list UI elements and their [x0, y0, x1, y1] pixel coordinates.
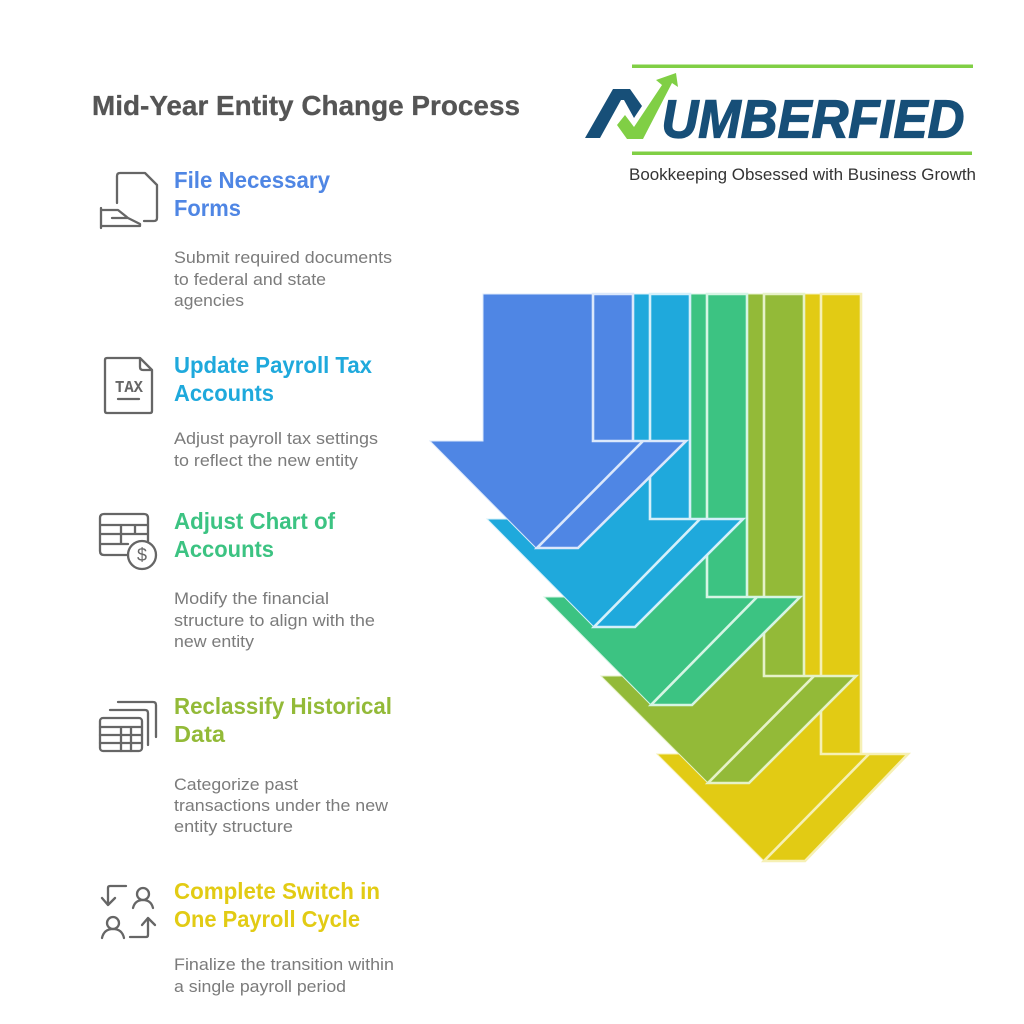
heading: file necessary forms: Forms — [174, 195, 241, 221]
heading: complete switch in one payroll cycle — [174, 878, 380, 932]
description: adjust chart of accounts: new entity — [174, 633, 255, 651]
description: complete switch in one payroll cycle: a single payroll period — [174, 978, 346, 996]
step 4: reclassify historical data — [100, 693, 392, 836]
arrow 5: yellow — [657, 294, 908, 861]
icon: table with dollar: $ — [137, 545, 147, 565]
heading: reclassify historical data: Reclassify Historical — [174, 693, 392, 719]
logo: Numberfied: Bookkeeping Obsessed with Business Growth — [629, 165, 976, 184]
step 5: complete switch in one payroll cycle — [102, 878, 394, 996]
step 1: file necessary forms — [101, 167, 392, 310]
description: update payroll tax accounts: Adjust payroll tax settings — [174, 430, 378, 448]
description: reclassify historical data: Categorize past — [174, 776, 298, 794]
heading: reclassify historical data: Data — [174, 721, 225, 747]
heading: adjust chart of accounts — [174, 508, 335, 562]
description: adjust chart of accounts: Modify the financial — [174, 590, 329, 608]
title: Mid-Year Entity Change Process — [92, 90, 520, 121]
step 3: adjust chart of accounts — [100, 508, 375, 651]
icon: people swapping — [102, 886, 155, 938]
description: update payroll tax accounts — [174, 430, 378, 470]
description: reclassify historical data — [174, 776, 388, 836]
icon: document in hand — [101, 173, 157, 228]
icon: table with dollar — [100, 514, 156, 569]
icon: tax document: TAX — [115, 379, 144, 398]
heading: update payroll tax accounts: Update Payroll Tax — [174, 352, 372, 378]
description: update payroll tax accounts: to reflect the new entity — [174, 452, 359, 470]
heading: adjust chart of accounts: Adjust Chart of — [174, 508, 335, 534]
icon: stacked tables — [100, 702, 156, 751]
description: reclassify historical data: transactions under the new — [174, 797, 388, 815]
description: file necessary forms: to federal and state — [174, 271, 326, 289]
heading: update payroll tax accounts: Accounts — [174, 380, 274, 406]
description: file necessary forms: Submit required documents — [174, 249, 392, 267]
heading: file necessary forms: File Necessary — [174, 167, 330, 193]
description: file necessary forms — [174, 249, 392, 310]
arrow 1: blue — [430, 294, 686, 548]
description: adjust chart of accounts — [174, 590, 375, 651]
logo: Numberfied — [585, 64, 976, 184]
heading: complete switch in one payroll cycle: One Payroll Cycle — [174, 906, 360, 932]
heading: file necessary forms — [174, 167, 330, 221]
description: file necessary forms: agencies — [174, 292, 244, 310]
arrow 3: green — [544, 294, 800, 705]
logo: Numberfied: UMBERFIED — [662, 90, 964, 150]
heading: complete switch in one payroll cycle: Complete Switch in — [174, 878, 380, 904]
heading: adjust chart of accounts: Accounts — [174, 536, 274, 562]
description: adjust chart of accounts: structure to align with the — [174, 612, 375, 630]
heading: reclassify historical data — [174, 693, 392, 747]
heading: update payroll tax accounts — [174, 352, 372, 406]
arrow 2: cyan blue — [487, 294, 743, 627]
step 2: update payroll tax accounts — [105, 352, 378, 470]
icon: tax document — [105, 358, 152, 413]
description: reclassify historical data: entity structure — [174, 818, 293, 836]
description: complete switch in one payroll cycle: Finalize the transition within — [174, 956, 394, 974]
description: complete switch in one payroll cycle — [174, 956, 394, 996]
chart: cascading arrows — [430, 294, 908, 861]
arrow 4: olive green — [601, 294, 856, 783]
